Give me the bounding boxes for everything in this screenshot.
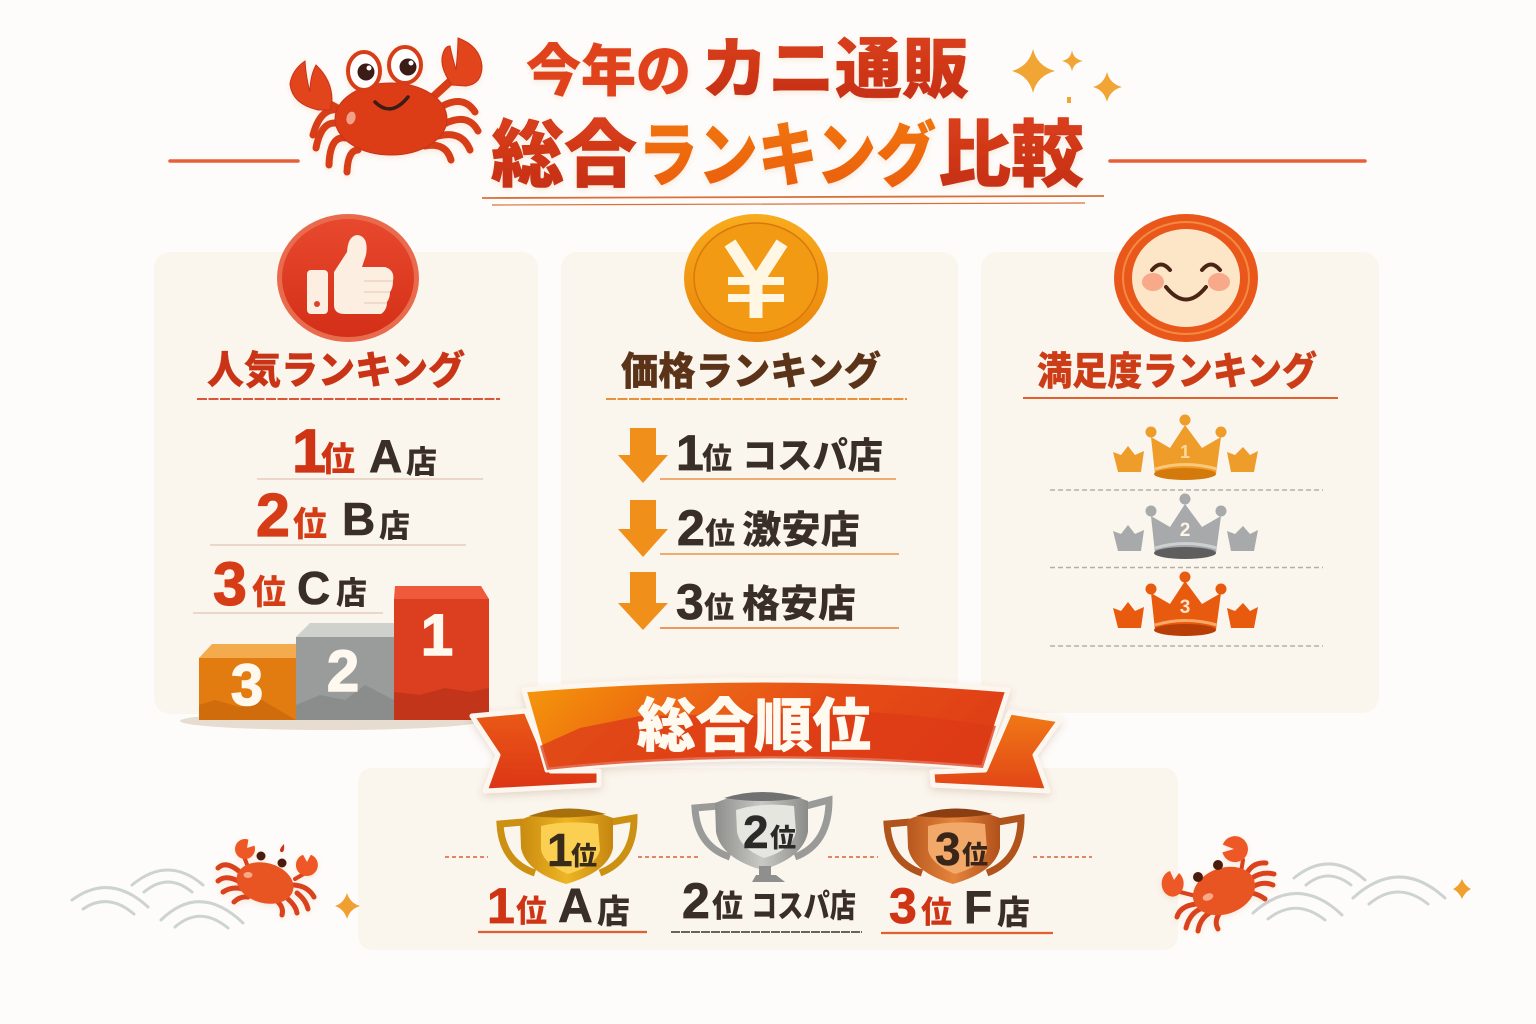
price rank 1: コスパ店 bbox=[742, 427, 883, 479]
title decorative rule left bbox=[170, 159, 298, 163]
podium step 1 bbox=[394, 586, 489, 720]
waves left bbox=[72, 870, 243, 928]
trophy: silver: 2 bbox=[743, 806, 769, 858]
overall rank 3 label: 位 bbox=[921, 887, 952, 932]
overall rank 2 label: コスパ店 bbox=[751, 881, 856, 927]
ribbon right tail bbox=[932, 712, 1060, 791]
overall rank 1 label: A bbox=[558, 880, 593, 933]
trophy: silver bbox=[695, 792, 829, 882]
icon: down arrow bbox=[618, 428, 668, 483]
title line 2: 比較 bbox=[938, 96, 1084, 202]
ribbon lower band bbox=[540, 712, 996, 770]
title line 2 bbox=[491, 96, 1084, 202]
overall rank 3 label bbox=[881, 878, 1053, 934]
icon: small crab left bbox=[218, 839, 318, 915]
ribbon body bbox=[524, 680, 1008, 770]
ribbon banner: overall ranking bbox=[472, 679, 1060, 791]
title line 1: 今年の bbox=[526, 27, 691, 108]
price rank 3: 格安店 bbox=[742, 573, 856, 628]
title line 1 bbox=[526, 16, 969, 112]
icon: silver crown row bbox=[1113, 494, 1258, 559]
icon: down arrow bbox=[618, 500, 668, 557]
title line 2: ランキング bbox=[638, 100, 936, 201]
popularity rank 1: 店 bbox=[406, 437, 437, 482]
popularity rank 3: 位 bbox=[252, 565, 286, 614]
trophy: gold bbox=[500, 808, 634, 884]
popularity rank 3: 3 bbox=[213, 550, 247, 618]
popularity rank 2: B bbox=[342, 493, 375, 545]
price rank 1: 1 bbox=[676, 425, 704, 481]
price rank 2: 位 bbox=[705, 509, 735, 553]
icon: sparkle right bbox=[1453, 879, 1471, 899]
dashed connectors between trophies bbox=[445, 856, 1092, 858]
podium step 1: 1 bbox=[421, 603, 453, 668]
icon: silver crown row: 2 bbox=[1180, 520, 1190, 541]
icon: thumbs up bbox=[277, 214, 419, 342]
price rank 3: 3 bbox=[676, 574, 704, 630]
trophy: gold: 1 bbox=[547, 824, 573, 876]
ribbon label: 総合順位 bbox=[637, 679, 871, 763]
title line 1: カニ通販 bbox=[701, 16, 969, 112]
popularity rank 1: 位 bbox=[321, 432, 355, 481]
trophy: bronze bbox=[887, 808, 1021, 884]
title line 2: 総合 bbox=[491, 96, 637, 202]
popularity rank 1 bbox=[292, 417, 437, 485]
waves right bbox=[1253, 864, 1445, 920]
popularity rank 2: 店 bbox=[379, 501, 410, 546]
icon: main crab bbox=[290, 38, 482, 172]
popularity rank 2: 2 bbox=[256, 481, 290, 549]
panel: price ranking background bbox=[561, 252, 958, 712]
overall rank 1 label: 1 bbox=[487, 878, 515, 934]
icon: smiling face bbox=[1114, 214, 1258, 342]
price rank 3: 位 bbox=[704, 583, 734, 627]
icon: down arrow bbox=[618, 572, 668, 630]
overall rank 2 label bbox=[671, 873, 862, 932]
icon: title sparkles bbox=[1012, 49, 1122, 103]
podium step 3 bbox=[199, 644, 296, 720]
ribbon left tail bbox=[472, 711, 599, 791]
overall rank 3 label: 店 bbox=[997, 886, 1030, 934]
title decorative rule right bbox=[1110, 159, 1365, 163]
popularity rank 1: 1 bbox=[292, 417, 326, 485]
overall rank 3 label: 3 bbox=[889, 878, 917, 934]
overall rank 2 label: 2 bbox=[682, 873, 710, 929]
podium step 2 bbox=[296, 623, 394, 720]
trophy: gold: 位 bbox=[571, 836, 597, 873]
price rank 3 bbox=[618, 572, 856, 630]
popularity rank 3 bbox=[213, 550, 367, 618]
popularity rank 2 bbox=[256, 481, 410, 549]
icon: gold crown row bbox=[1113, 414, 1258, 480]
popularity rank 3: C bbox=[297, 562, 330, 614]
popularity rank 2: 位 bbox=[293, 497, 327, 546]
panel: overall ranking background bbox=[358, 768, 1178, 950]
overall rank 1 label: 位 bbox=[516, 886, 547, 931]
price rank 2: 2 bbox=[677, 500, 705, 556]
podium step 3: 3 bbox=[231, 653, 263, 718]
price rank 2 bbox=[618, 499, 860, 557]
overall rank 2 label: 位 bbox=[712, 881, 743, 926]
overall rank 1 label: 店 bbox=[597, 885, 630, 933]
icon: bronze crown row bbox=[1113, 572, 1258, 636]
overall rank 1 label bbox=[478, 878, 647, 934]
price rank 1 bbox=[618, 425, 883, 483]
heading: satisfaction ranking: 満足度ランキング bbox=[1037, 341, 1317, 397]
price rank 1: 位 bbox=[702, 434, 732, 478]
trophy: bronze: 位 bbox=[962, 835, 988, 872]
heading: popularity ranking: 人気ランキング bbox=[207, 340, 465, 396]
title bbox=[491, 16, 1084, 202]
heading: price ranking: 価格ランキング bbox=[621, 341, 881, 397]
chart: podium bbox=[180, 586, 489, 730]
panel: satisfaction ranking background bbox=[981, 252, 1379, 713]
icon: yen coin bbox=[684, 214, 828, 342]
overall rank 3 label: F bbox=[964, 881, 992, 933]
icon: small crab right bbox=[1162, 836, 1274, 931]
popularity rank 3: 店 bbox=[336, 568, 367, 613]
trophy: bronze: 3 bbox=[935, 823, 961, 875]
price rank 2: 激安店 bbox=[742, 499, 860, 554]
podium step 2: 2 bbox=[327, 639, 359, 704]
icon: gold crown row: 1 bbox=[1180, 442, 1190, 462]
icon: sparkle left bbox=[335, 893, 360, 919]
icon: bronze crown row: 3 bbox=[1180, 597, 1190, 618]
popularity rank 1: A bbox=[369, 430, 402, 482]
title underlines bbox=[482, 196, 1104, 205]
panel: popularity ranking background bbox=[154, 252, 538, 714]
trophy: silver: 位 bbox=[770, 818, 796, 855]
